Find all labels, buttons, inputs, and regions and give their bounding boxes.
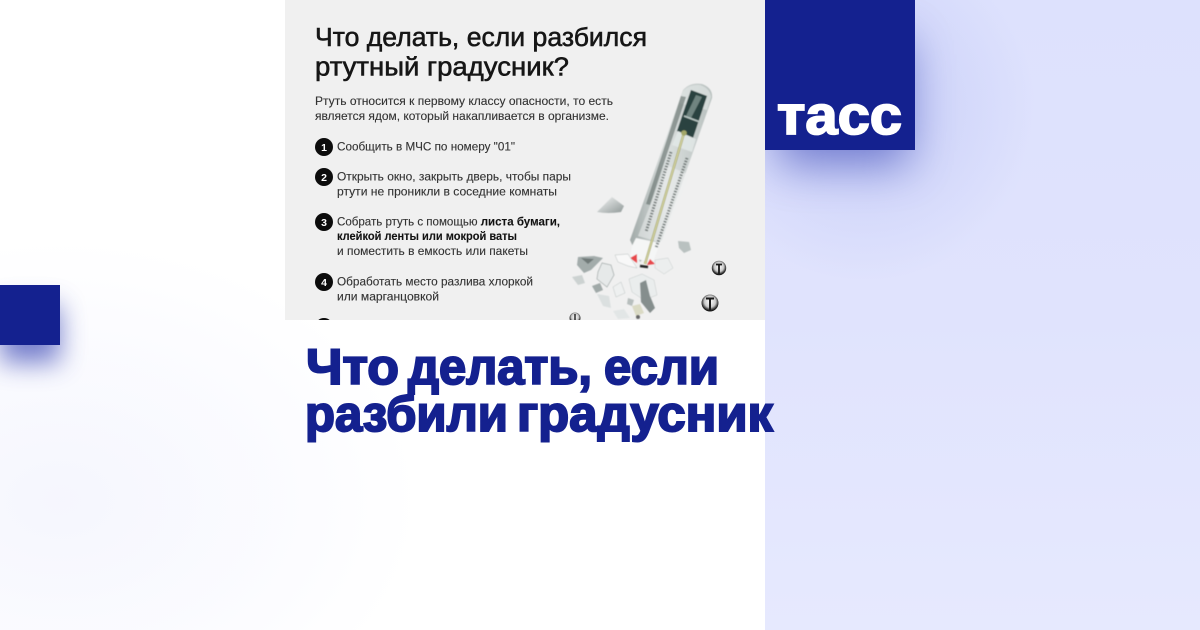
mercury droplets bbox=[570, 261, 726, 324]
main title: если bbox=[604, 339, 719, 395]
step 2 bbox=[315, 168, 571, 198]
red markers bbox=[630, 254, 637, 263]
step 4: Обработать место разлива хлоркой bbox=[337, 274, 533, 288]
step 2: 2 bbox=[321, 172, 327, 184]
background glow: left bbox=[0, 240, 420, 630]
step 5 marker bbox=[315, 318, 333, 336]
step 1: 1 bbox=[321, 142, 327, 154]
main title bbox=[305, 339, 775, 442]
main title: Что bbox=[306, 339, 399, 395]
step 4 bbox=[315, 273, 533, 304]
main title: делать, bbox=[408, 339, 592, 395]
panel intro text bbox=[315, 94, 613, 123]
logo: ТАСС: тасс bbox=[777, 84, 902, 146]
step 4: или марганцовкой bbox=[337, 290, 439, 304]
shadow: logo square bbox=[778, 40, 908, 165]
step 3: 3 bbox=[321, 217, 327, 229]
step 2: Открыть окно, закрыть дверь, чтобы пары bbox=[337, 170, 571, 184]
step 3: и поместить в емкость или пакеты bbox=[337, 244, 528, 258]
panel heading: ртутный градусник? bbox=[315, 54, 569, 82]
step 3 bbox=[315, 213, 560, 258]
step 1: Сообщить в МЧС по номеру "01" bbox=[337, 140, 515, 154]
logo: ТАСС bbox=[765, 0, 915, 150]
step 1 bbox=[315, 138, 515, 156]
main title: градусник bbox=[517, 386, 774, 442]
main title: разбили bbox=[305, 386, 508, 442]
step 4: 4 bbox=[321, 277, 327, 289]
panel intro text: является ядом, который накапливается в организме. bbox=[315, 109, 609, 123]
glass shards bbox=[597, 197, 624, 213]
panel intro text: Ртуть относится к первому классу опасности, то есть bbox=[315, 94, 613, 108]
panel heading bbox=[315, 24, 647, 82]
step 3: Собрать ртуть с помощью листа бумаги, bbox=[337, 214, 560, 228]
illustration: broken thermometer bbox=[572, 84, 712, 319]
background panel: right lavender bbox=[765, 0, 1200, 630]
shadow: left square bbox=[0, 305, 60, 363]
panel heading: Что делать, если разбился bbox=[315, 24, 647, 52]
step 2: ртути не проникли в соседние комнаты bbox=[337, 184, 557, 198]
panel: infographic preview bbox=[285, 0, 765, 320]
decorative blue square bbox=[0, 285, 60, 345]
step 3: клейкой ленты или мокрой ваты bbox=[337, 229, 517, 243]
thermometer body bbox=[630, 84, 712, 262]
